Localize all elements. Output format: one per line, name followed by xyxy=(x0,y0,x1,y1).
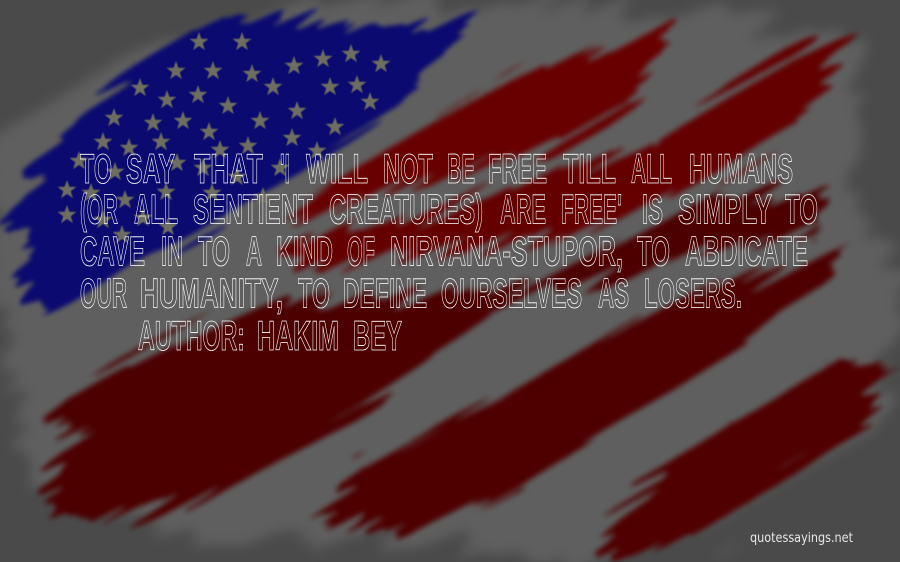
stars on canton xyxy=(58,32,390,243)
quote text xyxy=(80,145,818,359)
red stripe: bottom right xyxy=(570,335,900,562)
quote line 4 xyxy=(80,270,742,316)
quote line 4: TO xyxy=(298,270,330,316)
red stripe: second xyxy=(245,15,875,285)
quote line 2: FREE' xyxy=(561,186,622,232)
quote line 4: DEFINE xyxy=(343,270,427,316)
watermark: quotessayings.net xyxy=(750,530,853,546)
quote line 2: CREATURES) xyxy=(329,186,483,232)
author attribution: AUTHOR: xyxy=(138,312,245,359)
quote line 3: TO xyxy=(198,228,230,274)
quote line 1: ALL xyxy=(631,145,672,192)
quote line 1: HUMANS xyxy=(689,145,793,192)
quote line 2: TO xyxy=(785,186,818,232)
quote line 2: (OR xyxy=(80,186,118,232)
quote line 1: TILL xyxy=(563,145,616,192)
quote line 1: TO xyxy=(80,145,112,192)
quote line 3: A xyxy=(246,228,262,274)
quote line 3: TO xyxy=(637,228,670,274)
quote line 4: OUR xyxy=(80,270,127,316)
quote line 3: CAVE xyxy=(80,228,145,274)
red stripe: upper xyxy=(270,5,695,230)
quote line 4: HUMANITY, xyxy=(140,270,283,316)
quote line 1: NOT xyxy=(383,145,433,192)
quote line 3: IN xyxy=(161,228,183,274)
quote line 2: SIMPLY xyxy=(678,186,772,232)
red stripe: lower xyxy=(295,230,865,550)
quote line 1: SAY xyxy=(126,145,175,192)
quote line 4: OURSELVES xyxy=(441,270,582,316)
quote line 1: WILL xyxy=(306,145,368,192)
quote line 1: 'I xyxy=(280,145,290,192)
flag blue canton xyxy=(0,0,490,335)
quote line 1: THAT xyxy=(194,145,263,192)
quote line 2: IS xyxy=(642,186,663,232)
quote line 4: LOSERS. xyxy=(644,270,742,316)
quote line 1: FREE xyxy=(488,145,547,192)
author attribution: HAKIM xyxy=(257,312,339,359)
quote line 3: KIND xyxy=(276,228,333,274)
quote line 2: ARE xyxy=(500,186,546,232)
quote line 1 xyxy=(80,145,793,192)
quote line 3: OF xyxy=(347,228,375,274)
quote line 2: SENTIENT xyxy=(193,186,313,232)
red stripe: central large xyxy=(20,170,855,535)
quote line 2: ALL xyxy=(134,186,178,232)
quote line 3 xyxy=(80,228,808,274)
quote line 4: AS xyxy=(598,270,629,316)
quote line 1: BE xyxy=(447,145,475,192)
quote line 2 xyxy=(80,186,818,232)
quote line 3: NIRVANA-STUPOR, xyxy=(390,228,623,274)
quote line 3: ABDICATE xyxy=(685,228,808,274)
author attribution: BEY xyxy=(353,312,402,359)
